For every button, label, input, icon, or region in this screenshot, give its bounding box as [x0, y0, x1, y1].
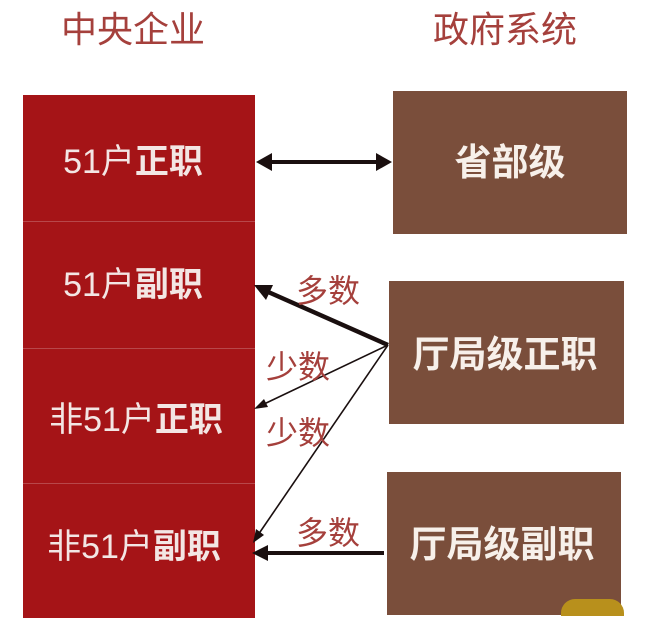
level: non-51 main: 正职	[155, 401, 223, 439]
box: department main	[389, 281, 624, 424]
level: 51 main: 正职	[135, 142, 203, 180]
box: provincial level: 省部级	[454, 142, 566, 182]
label: majority lower: 多数	[296, 515, 360, 551]
box: provincial level	[393, 91, 627, 234]
arrow: provincial to 51 main	[256, 153, 392, 171]
heading: government system: 政府系统	[433, 9, 577, 50]
level: non-51 deputy	[47, 528, 221, 566]
level: 51 deputy: 副职	[135, 266, 203, 304]
smudge mark	[561, 599, 624, 616]
level: non-51 deputy: 非51户	[47, 528, 153, 566]
level: 51 main: 51户	[63, 142, 135, 180]
label: minority upper: 少数	[266, 349, 330, 385]
heading: central enterprises: 中央企业	[61, 9, 205, 50]
arrow: department deputy to non-51 deputy	[252, 545, 384, 561]
box: department deputy: 厅局级副职	[410, 524, 594, 564]
level: 51 main	[23, 95, 255, 222]
arrow: department main to non-51 main	[254, 345, 388, 409]
box: department main: 厅局级正职	[412, 334, 598, 374]
level: non-51 main	[23, 349, 255, 484]
label: minority lower: 少数	[266, 415, 330, 451]
label: majority upper: 多数	[296, 273, 360, 309]
arrow: department main to 51 deputy	[254, 285, 388, 345]
level: non-51 deputy: 副职	[153, 528, 221, 566]
panel: central enterprise levels	[23, 95, 255, 618]
box: department deputy	[387, 472, 621, 615]
level: non-51 main: 非51户	[49, 401, 155, 439]
level: 51 deputy: 51户	[63, 266, 135, 304]
level: 51 deputy	[23, 222, 255, 349]
arrow: department main to non-51 deputy	[253, 345, 388, 543]
